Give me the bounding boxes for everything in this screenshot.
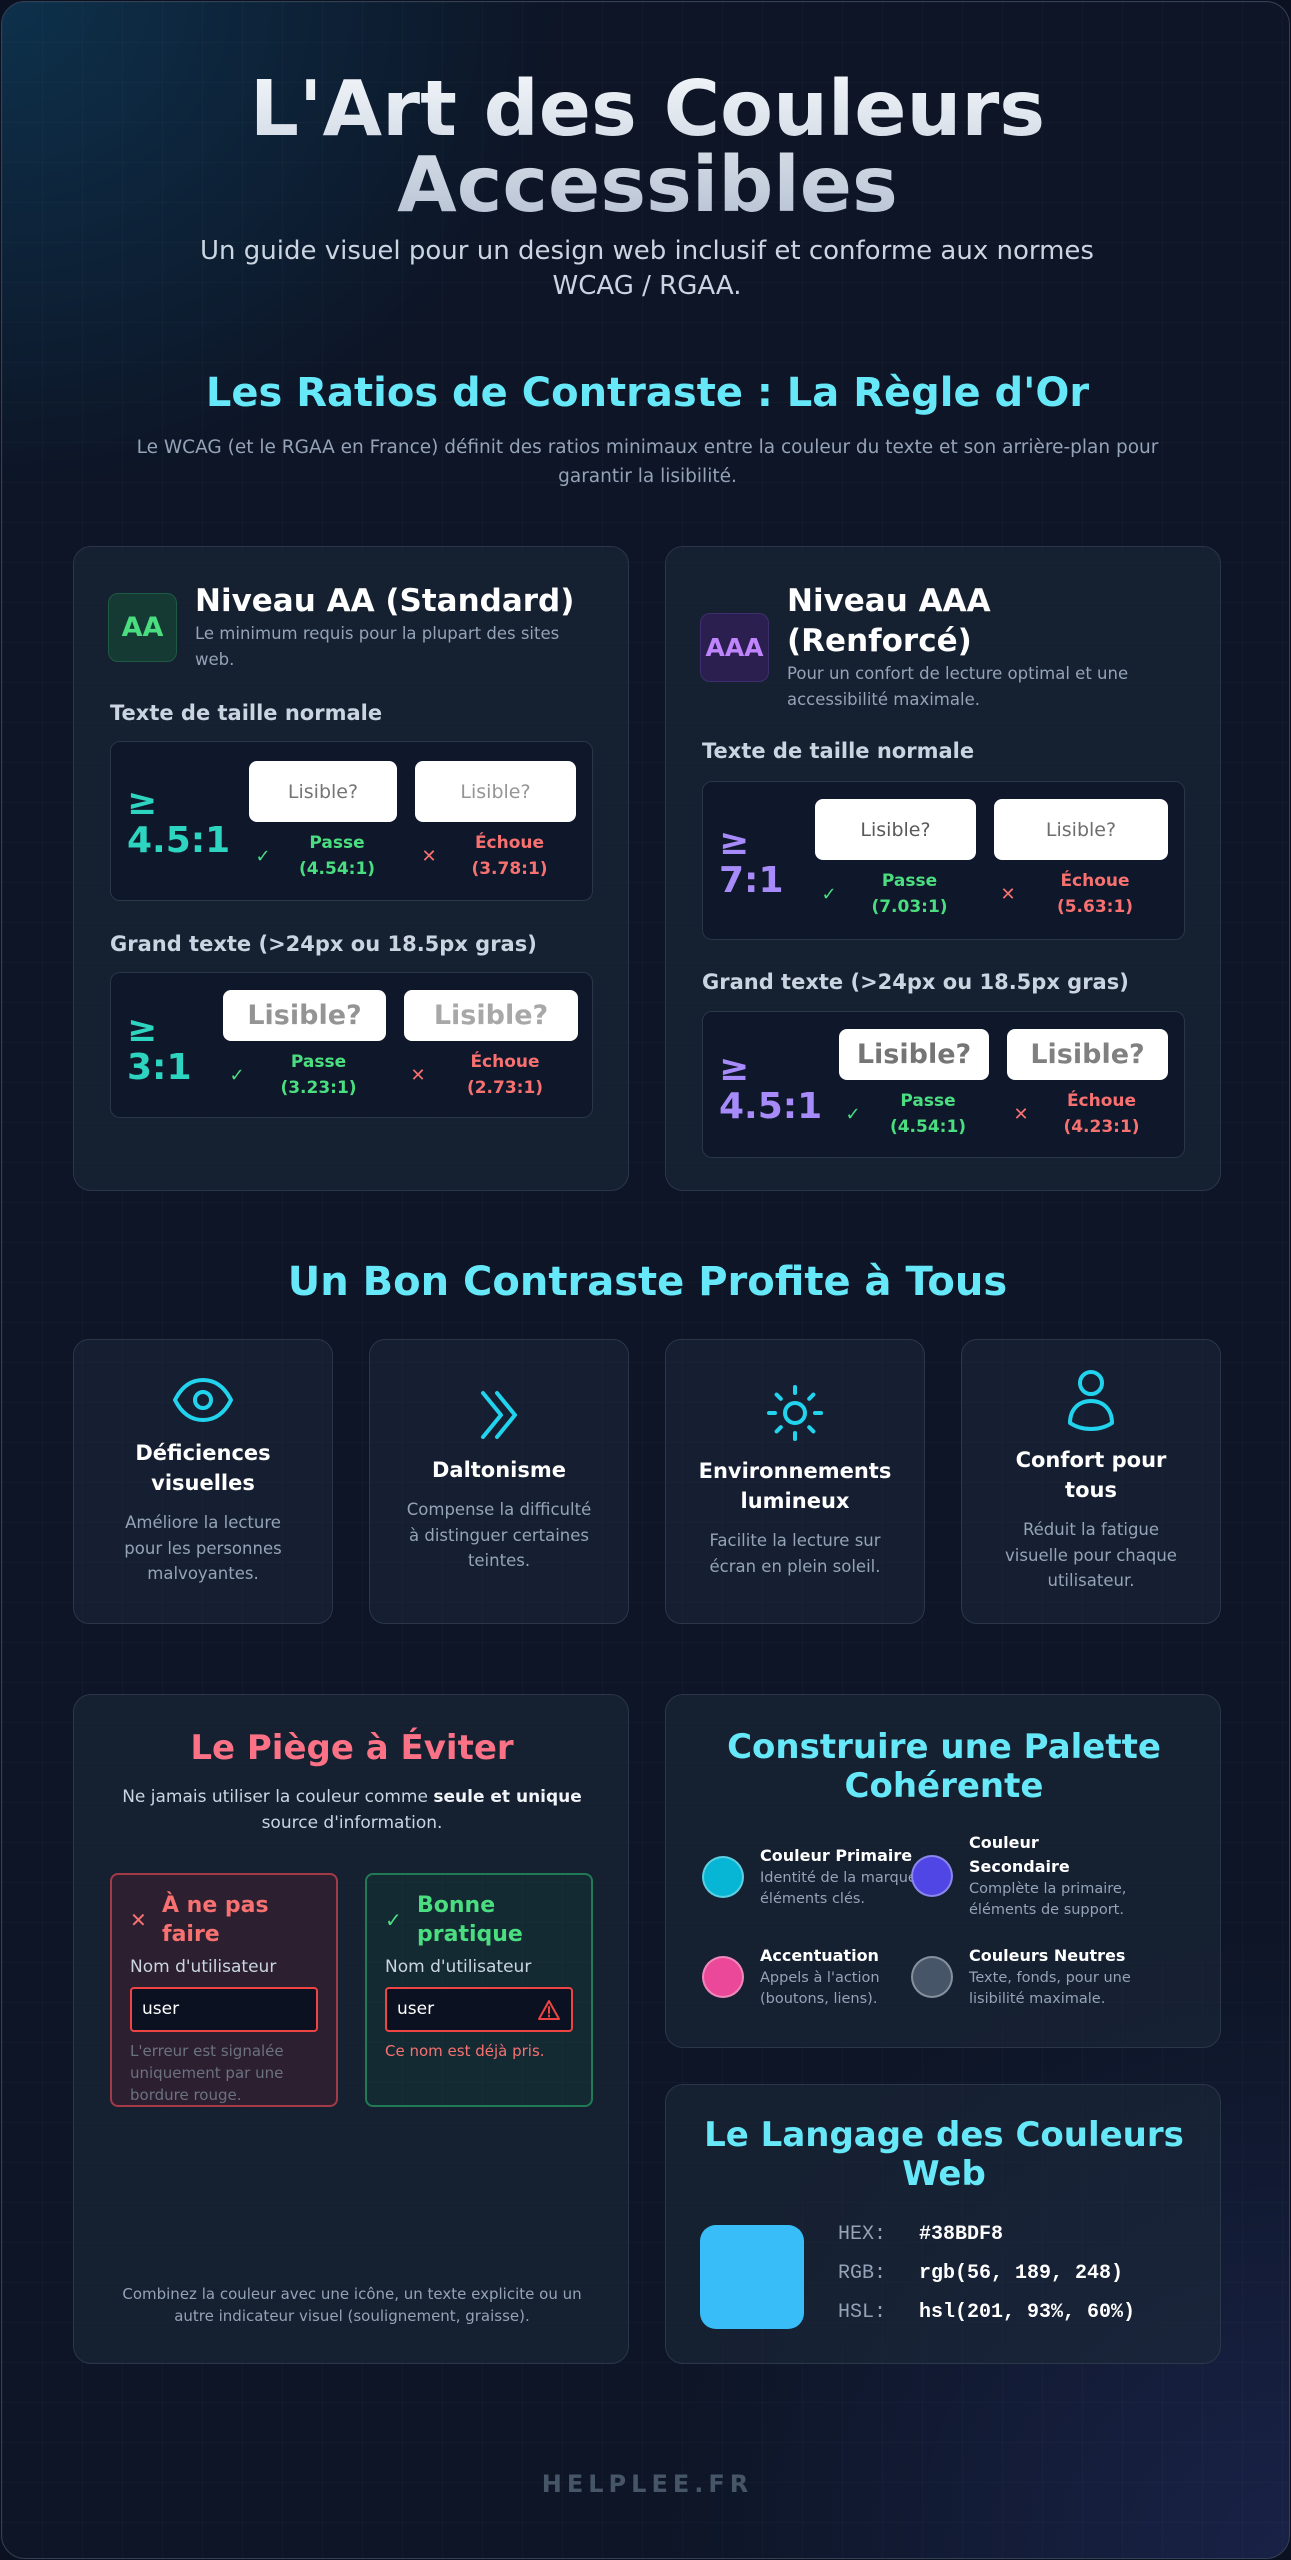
box: 7:1: ✕	[1000, 884, 1016, 904]
box: 3:1: ✓	[229, 1064, 245, 1086]
panel: niveau AAA	[665, 546, 1221, 1191]
AAA header: Niveau AAA	[787, 583, 991, 619]
box: 4.5:1: (3.78:1)	[471, 859, 548, 879]
box: 3:1: Lisible?	[247, 1000, 362, 1031]
langage title	[704, 2115, 1184, 2194]
panel: langage des couleurs	[665, 2084, 1221, 2364]
box: 4.5:1: ✕	[421, 846, 437, 866]
box: 7:1: Lisible?	[860, 818, 931, 840]
palette title	[727, 1727, 1161, 1806]
label large text: Grand texte (>24px ou 18.5px gras)	[110, 932, 537, 956]
panel: niveau AA	[73, 546, 629, 1191]
card: confort pour tous: visuelle pour chaque utilisateur.	[1005, 1546, 1177, 1590]
card: environnements lumineux: lumineux	[741, 1489, 849, 1513]
box: 3:1: (3.23:1)	[280, 1078, 357, 1098]
bad heading	[130, 1891, 269, 1947]
card: daltonisme	[369, 1339, 629, 1624]
good heading: pratique	[417, 1922, 523, 1947]
box: 3:1: ✕	[410, 1064, 426, 1086]
card: daltonisme: Compense la difficulté	[407, 1500, 591, 1519]
box: 4.5:1	[110, 741, 593, 901]
good input with warning icon: user	[397, 1999, 434, 2019]
example: bad: L'erreur est signalée uniquement par une bordure rouge.	[130, 2042, 284, 2104]
color swatch	[700, 2225, 804, 2329]
AAA header: (Renforcé)	[787, 623, 972, 659]
box: 4.5:1: ✓	[255, 846, 271, 866]
subtitle: Un guide visuel pour un design web inclusif et conforme aux normes	[200, 236, 1094, 266]
box: 4.5:1 large: (4.23:1)	[1063, 1117, 1140, 1137]
color codes: HEX:	[838, 2223, 886, 2246]
card: deficiences visuelles: Déficiences	[135, 1441, 271, 1465]
example: bad	[110, 1873, 338, 2107]
panel: palette	[665, 1694, 1221, 2048]
badge AA: AA	[122, 612, 163, 642]
box: 4.5:1 large: 4.5:1	[719, 1086, 822, 1127]
intro text: garantir la lisibilité.	[558, 466, 737, 487]
box: 4.5:1 large: Lisible?	[1030, 1039, 1145, 1070]
icon: eye	[173, 1378, 233, 1422]
subtitle	[200, 236, 1094, 301]
label large text: Grand texte (>24px ou 18.5px gras)	[702, 970, 1129, 994]
swatch: primaire: Couleur Primaire	[760, 1846, 912, 1865]
swatch: primaire: Identité de la marque, éléments clés.	[760, 1870, 921, 1907]
panel: langage des couleurs: #38BDF8	[919, 2223, 1003, 2246]
box: 4.5:1 large: ✕	[1013, 1104, 1029, 1124]
bad input	[130, 1987, 318, 2032]
langage title: Le Langage des Couleurs	[704, 2115, 1184, 2155]
badge AA	[108, 592, 177, 662]
subtitle: WCAG / RGAA.	[553, 271, 741, 301]
box: 7:1: (5.63:1)	[1057, 897, 1133, 917]
box: 4.5:1: (4.54:1)	[299, 859, 375, 879]
label normal text: Texte de taille normale	[702, 739, 974, 763]
box: 4.5:1: ≥	[127, 782, 157, 823]
good heading	[385, 1893, 523, 1947]
AAA header	[700, 583, 1128, 709]
bad heading: À ne pas	[162, 1893, 269, 1918]
box: 3:1: Passe	[291, 1052, 346, 1072]
AA header: Niveau AA (Standard)	[195, 583, 574, 619]
box: 3:1: 3:1	[127, 1047, 192, 1088]
box: 4.5:1 large: Échoue	[1067, 1091, 1136, 1111]
example: good: Nom d'utilisateur	[385, 1957, 531, 1977]
card: deficiences visuelles: visuelles	[151, 1471, 255, 1495]
box: 4.5:1 large: ✓	[845, 1104, 861, 1124]
swatch: secondaire: Couleur	[969, 1833, 1039, 1852]
icon: chevrons	[480, 1390, 517, 1440]
card: confort pour tous: tous	[1065, 1478, 1117, 1502]
bad input: user	[142, 1999, 179, 2019]
good input with warning icon	[385, 1987, 573, 2032]
box: 7:1: 7:1	[719, 860, 784, 901]
swatch: accentuation	[702, 1946, 880, 2007]
card: daltonisme: Daltonisme	[432, 1458, 566, 1482]
card: confort pour tous: Confort pour	[1016, 1448, 1166, 1472]
icon: sun	[767, 1385, 823, 1441]
panel: langage des couleurs: hsl(201, 93%, 60%)	[919, 2301, 1135, 2324]
heading: benefits: Un Bon Contraste Profite à Tous	[288, 1259, 1007, 1305]
swatch: neutres: Couleurs Neutres	[969, 1946, 1125, 1965]
card: deficiences visuelles	[73, 1339, 333, 1624]
box: 7:1: ✓	[821, 884, 837, 904]
box: 3:1: (2.73:1)	[467, 1078, 543, 1098]
swatch: accentuation: Appels à l'action (boutons, liens).	[760, 1970, 880, 2007]
title: L'Art des Couleurs	[250, 65, 1045, 154]
box: 4.5:1: Lisible?	[460, 780, 531, 802]
swatch: accentuation: Accentuation	[760, 1946, 879, 1965]
example: good: Ce nom est déjà pris.	[385, 2042, 545, 2060]
card: environnements lumineux	[665, 1339, 925, 1624]
panel: le piège à éviter	[73, 1694, 629, 2364]
bad heading: faire	[162, 1922, 220, 1947]
panel: langage des couleurs: rgb(56, 189, 248)	[919, 2262, 1123, 2285]
AAA header: Pour un confort de lecture optimal et une accessibilité maximale.	[787, 664, 1128, 709]
card: confort pour tous	[961, 1339, 1221, 1624]
box: 7:1: (7.03:1)	[871, 897, 948, 917]
card: daltonisme: à distinguer certaines teintes.	[409, 1526, 589, 1570]
box: 4.5:1 large: ≥	[719, 1048, 749, 1089]
AA header	[108, 583, 574, 669]
intro text	[137, 437, 1158, 487]
swatch: neutres	[911, 1946, 1131, 2007]
swatch: secondaire	[911, 1833, 1126, 1918]
icon: user	[1068, 1370, 1114, 1431]
card: environnements lumineux: Facilite la lecture sur écran en plein soleil.	[709, 1531, 881, 1576]
bad heading: ✕	[130, 1908, 147, 1932]
example: good	[365, 1873, 593, 2107]
box: 3:1: Échoue	[470, 1052, 540, 1072]
card: environnements lumineux: Environnements	[699, 1459, 891, 1483]
heading: contrast ratios: Les Ratios de Contraste : La Règle d'Or	[206, 370, 1089, 416]
box: 7:1: Lisible?	[1046, 818, 1116, 840]
box: 7:1: Échoue	[1060, 871, 1130, 891]
good heading: Bonne	[417, 1893, 495, 1918]
footer: HELPLEE.FR	[542, 2470, 753, 2498]
box: 3:1: Lisible?	[434, 1000, 548, 1031]
piege intro: Ne jamais utiliser la couleur comme seule et unique source d'information.	[122, 1787, 582, 1833]
card: deficiences visuelles: Améliore la lecture pour les personnes malvoyantes.	[124, 1513, 282, 1583]
color codes: HSL:	[838, 2301, 886, 2324]
swatch: secondaire: Complète la primaire, éléments de support.	[969, 1881, 1126, 1918]
box: 4.5:1 large: Lisible?	[857, 1039, 971, 1070]
box: 4.5:1 large: (4.54:1)	[890, 1117, 966, 1137]
box: 3:1	[110, 972, 593, 1118]
badge AAA	[700, 612, 769, 682]
swatch: neutres: Texte, fonds, pour une lisibilité maximale.	[969, 1970, 1131, 2007]
palette title: Construire une Palette	[727, 1727, 1161, 1767]
langage title: Web	[902, 2154, 986, 2194]
title: Accessibles	[397, 141, 898, 230]
card: confort pour tous: Réduit la fatigue	[1023, 1520, 1159, 1539]
AA header: Le minimum requis pour la plupart des sites web.	[195, 624, 559, 669]
box: 7:1	[702, 781, 1185, 940]
swatch: secondaire: Secondaire	[969, 1857, 1070, 1876]
box: 4.5:1: Échoue	[475, 833, 544, 853]
box: 7:1: ≥	[719, 822, 749, 863]
good heading: ✓	[385, 1908, 402, 1932]
label normal text: Texte de taille normale	[110, 701, 382, 725]
intro text: Le WCAG (et le RGAA en France) définit des ratios minimaux entre la couleur du texte et son arrière-plan pour	[137, 437, 1158, 458]
box: 4.5:1: 4.5:1	[127, 820, 230, 861]
box: 4.5:1: Passe	[309, 833, 365, 853]
example: bad: Nom d'utilisateur	[130, 1957, 276, 1977]
swatch: primaire	[702, 1846, 921, 1907]
title	[2, 72, 1291, 224]
box: 4.5:1: Lisible?	[288, 780, 358, 802]
piege footer text: Combinez la couleur avec une icône, un texte explicite ou un autre indicateur visuel (soulignement, graisse).	[122, 2285, 582, 2325]
palette title: Cohérente	[845, 1766, 1043, 1806]
color codes	[838, 2223, 886, 2324]
box: 4.5:1 large	[702, 1011, 1185, 1158]
box: 4.5:1 large: Passe	[900, 1091, 956, 1111]
box: 7:1: Passe	[882, 871, 937, 891]
box: 3:1: ≥	[127, 1009, 157, 1050]
color codes: RGB:	[838, 2262, 886, 2285]
piege title: Le Piège à Éviter	[190, 1728, 514, 1768]
badge AAA: AAA	[705, 632, 764, 662]
